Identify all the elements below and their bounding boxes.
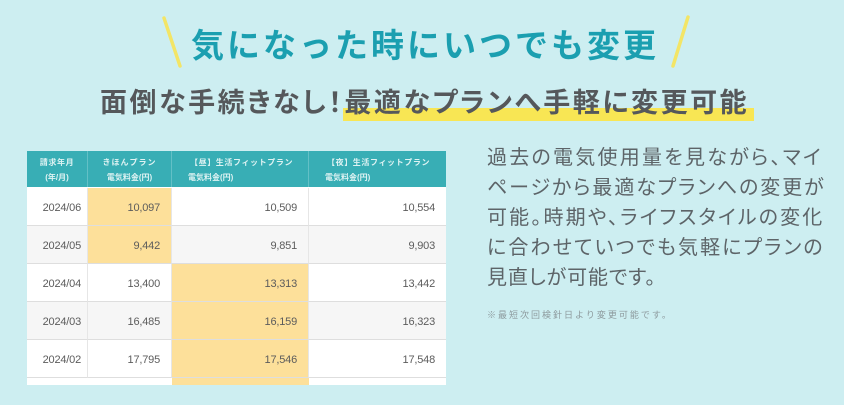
table header: 電気料金(円) [325, 173, 370, 182]
body text: に合わせていつでも気軽にプランの [487, 237, 825, 259]
table header: (年/月) [45, 173, 69, 182]
row 2024/03: 16,159 [265, 316, 297, 328]
row 2024/03 [27, 302, 446, 340]
subtitle: 面倒な手続きなし！最適なプランへ手軽に変更可能 [100, 88, 749, 118]
row 2024/05: 9,903 [408, 240, 435, 252]
row 2024/02: 2024/02 [43, 354, 81, 366]
table header: きほんプラン [102, 158, 156, 167]
table header: 請求年月 [40, 158, 74, 167]
row 2024/04: 13,313 [265, 278, 297, 290]
row 2024/05: 9,442 [133, 240, 160, 252]
body text: 見直しが可能です。 [487, 267, 656, 289]
body text [487, 146, 826, 289]
comparison table [27, 151, 446, 385]
body text: 可能。時期や、ライフスタイルの変化 [487, 207, 824, 229]
row 2024/03: 16,485 [128, 316, 160, 328]
row 2024/05: 9,851 [270, 240, 297, 252]
row 2024/02: 17,546 [265, 354, 297, 366]
row 2024/03: 2024/03 [43, 316, 81, 328]
row 2024/04 [27, 264, 446, 302]
table header: 【昼】生活フィットプラン [190, 158, 293, 167]
footnote: ※最短次回検針日より変更可能です。 [487, 310, 673, 320]
row 2024/06 [27, 188, 446, 226]
row 2024/02: 17,795 [128, 354, 160, 366]
row stripes and highlighted cheapest cells [27, 188, 446, 385]
row 2024/05 [27, 226, 446, 264]
row 2024/06: 10,509 [265, 202, 297, 214]
table header: 電気料金(円) [188, 173, 233, 182]
decorative slash: right [671, 15, 690, 68]
row 2024/03: 16,323 [403, 316, 435, 328]
row 2024/06: 10,554 [403, 202, 435, 214]
row 2024/06: 10,097 [128, 202, 160, 214]
subtitle highlight marker [343, 108, 754, 121]
row 2024/04: 2024/04 [43, 278, 81, 290]
row 2024/02 [27, 340, 446, 378]
table header: 電気料金(円) [107, 173, 152, 182]
body text: ページから最適なプランへの変更が [487, 177, 826, 199]
row 2024/02: 17,548 [403, 354, 435, 366]
table header [27, 151, 446, 187]
row 2024/04: 13,442 [403, 278, 435, 290]
title: 気になった時にいつでも変更 [191, 27, 659, 64]
row 2024/04: 13,400 [128, 278, 160, 290]
decorative slash: left [162, 16, 182, 68]
row 2024/06: 2024/06 [43, 202, 81, 214]
body text: 過去の電気使用量を見ながら、マイ [487, 147, 823, 169]
row 2024/05: 2024/05 [43, 240, 81, 252]
table header: 【夜】生活フィットプラン [327, 158, 430, 167]
